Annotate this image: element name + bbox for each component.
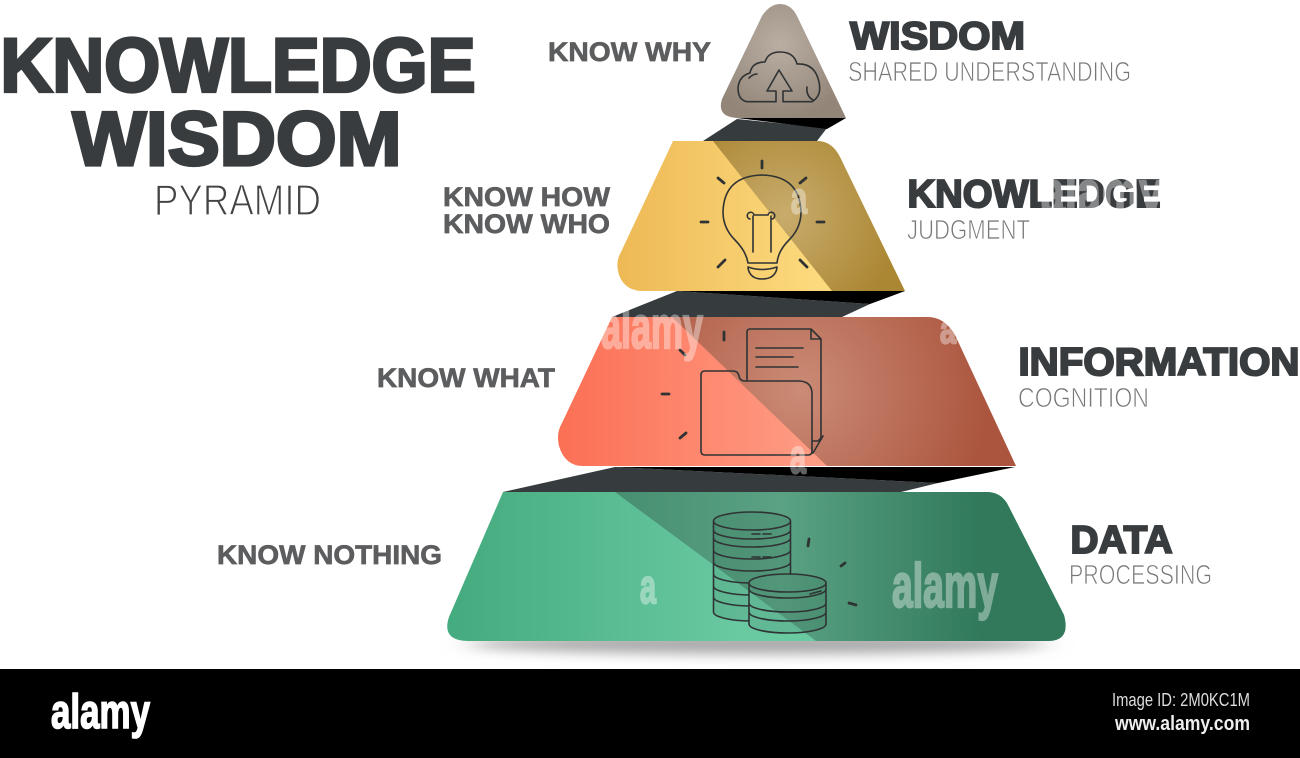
right label: information bbox=[1018, 341, 1300, 413]
footer band bbox=[0, 669, 1300, 758]
footer logo: alamy bbox=[51, 686, 150, 739]
watermarks bbox=[601, 159, 1163, 621]
right label: data: PROCESSING bbox=[1069, 559, 1212, 590]
right label: knowledge: KNOWLEDGE bbox=[908, 173, 1160, 216]
tier connector: wisdom to knowledge bbox=[703, 118, 846, 141]
watermarks: a bbox=[940, 308, 957, 352]
right label: knowledge: JUDGMENT bbox=[907, 214, 1030, 245]
watermarks: alamy bbox=[1041, 159, 1163, 226]
ground shadow bbox=[467, 634, 1047, 654]
left label: know why: KNOW WHY bbox=[548, 37, 711, 67]
right label: wisdom bbox=[848, 15, 1131, 87]
icon: coin stacks bbox=[712, 511, 858, 634]
right label: information: COGNITION bbox=[1018, 382, 1149, 413]
watermarks: a bbox=[791, 174, 807, 223]
title: KNOWLEDGE bbox=[0, 24, 476, 108]
right label: data: DATA bbox=[1070, 519, 1172, 562]
right label: information: INFORMATION bbox=[1018, 341, 1300, 384]
watermarks: alamy bbox=[892, 552, 998, 621]
title: PYRAMID bbox=[154, 176, 321, 225]
tier: wisdom bbox=[721, 4, 846, 118]
watermarks: a bbox=[790, 431, 806, 484]
right label: knowledge bbox=[907, 173, 1160, 245]
right label: data bbox=[1069, 519, 1212, 590]
left label: know what: KNOW WHAT bbox=[377, 363, 556, 393]
title: WISDOM bbox=[72, 97, 402, 182]
tier: information bbox=[558, 317, 1030, 466]
icon: light bulb bbox=[701, 161, 824, 279]
tier: knowledge bbox=[617, 141, 920, 291]
watermarks: a bbox=[640, 561, 656, 614]
right label: wisdom: WISDOM bbox=[850, 15, 1025, 58]
left label: know nothing: KNOW NOTHING bbox=[217, 540, 442, 570]
tier connector: information to data bbox=[503, 467, 1015, 492]
left label: know how, know who: KNOW HOW bbox=[443, 182, 611, 212]
watermarks: alamy bbox=[601, 294, 703, 361]
left label: know how, know who bbox=[443, 182, 611, 239]
icon: folder and document bbox=[662, 329, 823, 455]
tier: data bbox=[447, 492, 1080, 645]
footer url: www.alamy.com bbox=[1114, 713, 1250, 735]
icon: cloud upload bbox=[738, 52, 820, 102]
tier connector: knowledge to information bbox=[612, 291, 905, 317]
right label: wisdom: SHARED UNDERSTANDING bbox=[848, 56, 1131, 87]
left label: know how, know who: KNOW WHO bbox=[443, 209, 610, 239]
footer image id: Image ID: 2M0KC1M bbox=[1112, 690, 1250, 710]
title bbox=[0, 24, 476, 225]
